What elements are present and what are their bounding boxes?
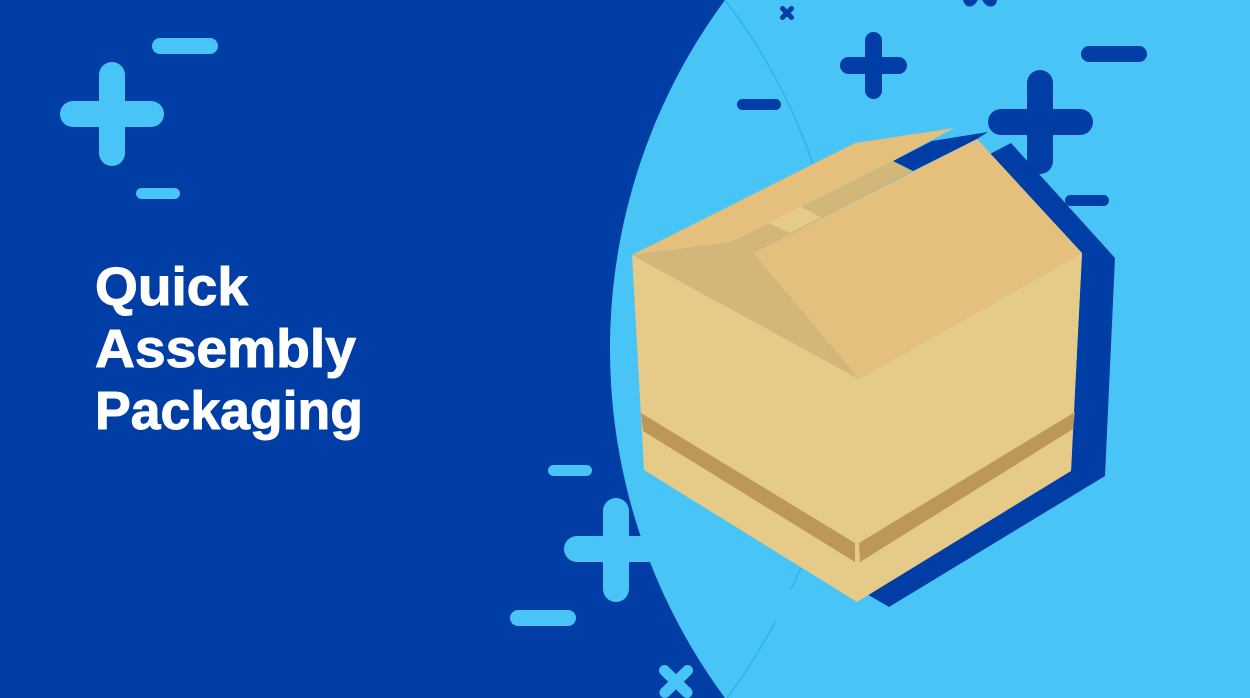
thin arc line — [725, 0, 813, 698]
icon: small crosses at top — [782, 0, 997, 18]
box tape left — [641, 413, 855, 562]
box drop shadow — [860, 143, 1115, 607]
title: Quick — [95, 257, 249, 317]
title: Packaging — [95, 381, 363, 441]
panel: light blue circle — [610, 0, 1250, 698]
title: Assembly — [95, 319, 356, 379]
box interior shade — [632, 161, 913, 379]
box tape right — [859, 412, 1075, 562]
box tape strip on flap — [768, 207, 821, 233]
box interior opening — [893, 132, 988, 171]
icon: top plus and minus signs on light blue — [737, 32, 1147, 206]
box front faces — [632, 253, 1082, 602]
icon: cardboard box — [632, 128, 1115, 607]
icon: top-left plus and minus signs — [60, 38, 218, 199]
icon: bottom-left plus and minus signs — [510, 465, 668, 626]
box front flap — [753, 139, 1082, 379]
box back flap — [632, 128, 954, 255]
title — [95, 257, 363, 441]
icon: bottom cross on navy — [664, 670, 688, 692]
